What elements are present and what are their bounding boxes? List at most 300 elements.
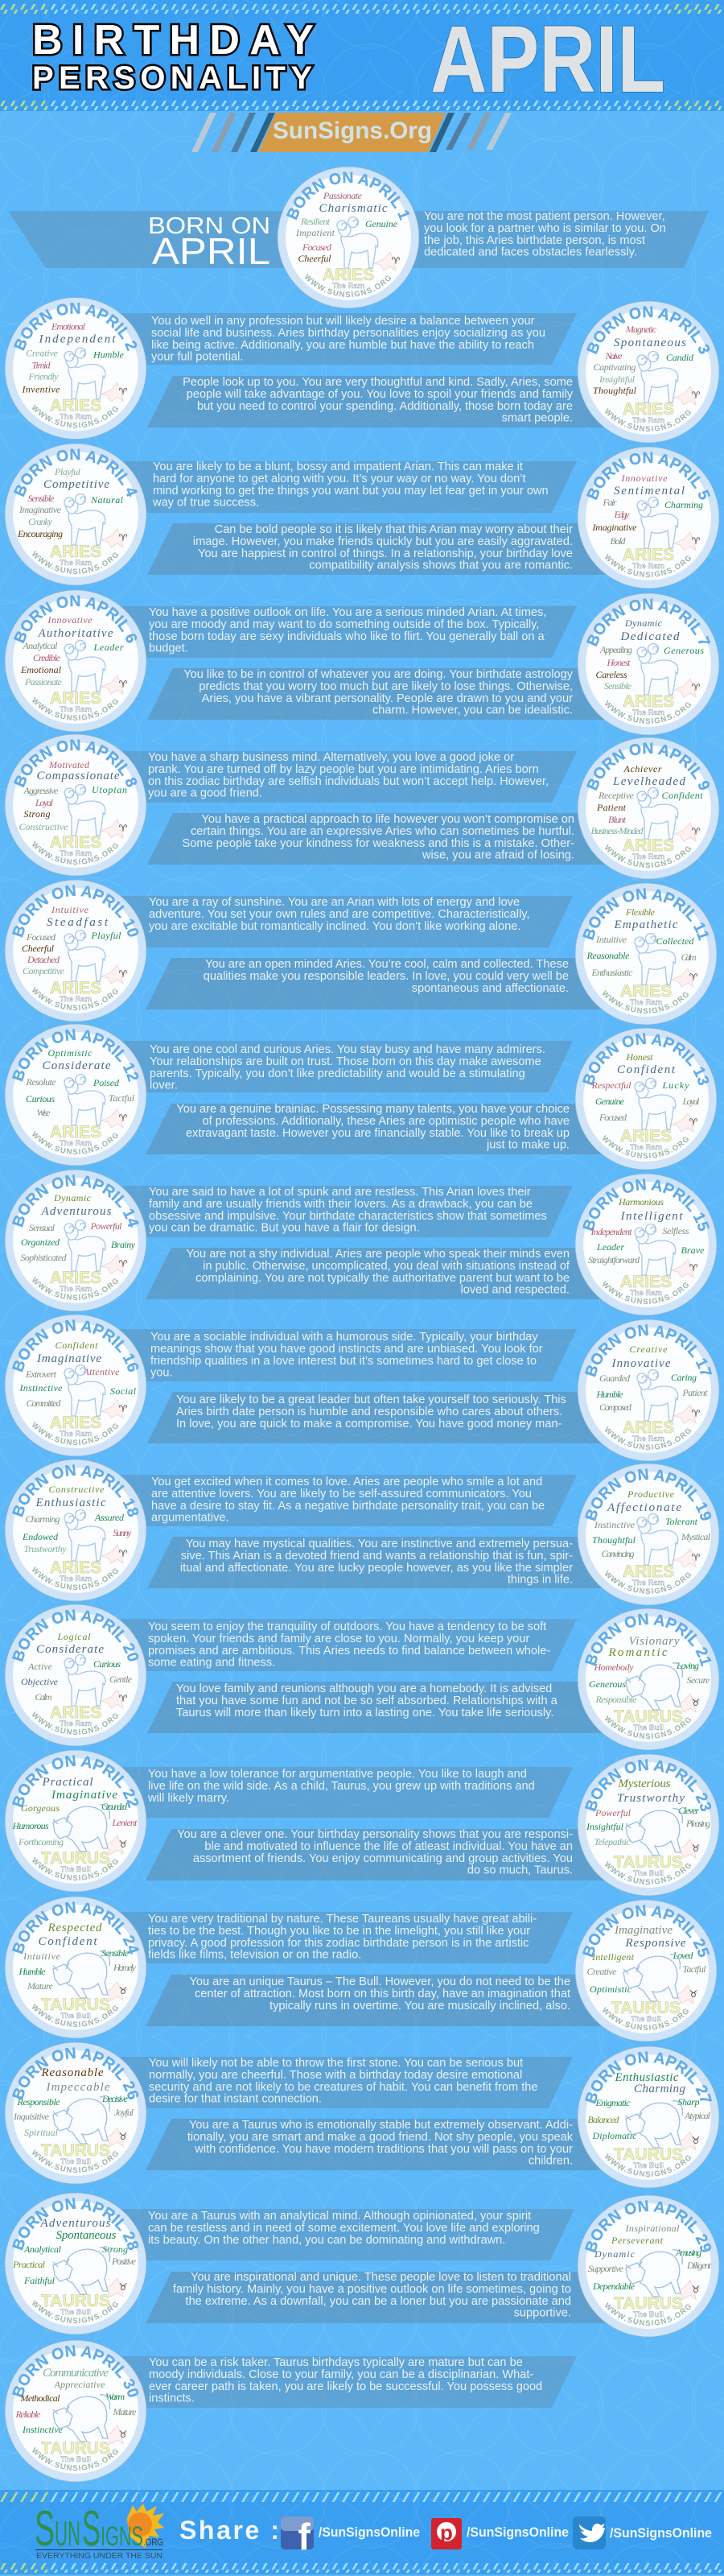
traits bbox=[21, 1192, 136, 1263]
icon: pinterest: p bbox=[440, 2520, 453, 2545]
traits: Patient bbox=[596, 802, 627, 813]
sign: TAURUS bbox=[614, 1707, 683, 1726]
traits: Considerate bbox=[42, 1059, 111, 1072]
traits: Leader bbox=[596, 1241, 624, 1253]
traits: Confident bbox=[39, 1935, 97, 1948]
text: april 5: compatibility analysis shows that you are romantic. bbox=[309, 559, 573, 572]
sign: TAURUS bbox=[611, 1999, 681, 2017]
traits: Assured bbox=[94, 1512, 125, 1523]
traits: Thoughtful bbox=[592, 1534, 636, 1546]
badge: April 1 bbox=[277, 166, 420, 309]
zodiac glyph: ♈ bbox=[119, 1548, 128, 1559]
traits: Practical bbox=[12, 2259, 46, 2270]
animal: The Ram bbox=[632, 1435, 664, 1443]
icon: facebook bbox=[281, 2516, 314, 2557]
traits: Imaginative bbox=[614, 1924, 673, 1937]
text: april 18: have a desire to stay fit. As a negative birthdate personality trait, you can be bbox=[151, 1500, 545, 1513]
website: WWW.SUNSIGNS.ORG bbox=[605, 1571, 691, 1594]
traits: Emotional bbox=[51, 320, 86, 332]
panel: april 14 text bbox=[121, 1186, 573, 1237]
website: WWW.SUNSIGNS.ORG bbox=[605, 844, 691, 868]
text: april 27: tionally, you are smart and make a good friend. Not shy people, you speak bbox=[187, 2131, 574, 2144]
traits: Imaginative bbox=[592, 522, 637, 533]
traits: Genuine bbox=[595, 1096, 625, 1107]
traits: Levelheaded bbox=[612, 775, 685, 788]
text: april 28: You are a Taurus with an analytical mind. Although opinionated, your spirit bbox=[148, 2210, 531, 2223]
text: april 17: You are likely to be a great leader but often take yourself too seriously. This bbox=[176, 1393, 566, 1406]
website: WWW.SUNSIGNS.ORG bbox=[603, 2153, 694, 2179]
panel: april 12 text bbox=[121, 1041, 573, 1092]
traits: Telepathic bbox=[594, 1836, 631, 1847]
sign: TAURUS bbox=[41, 1996, 110, 2014]
sign: ARIES bbox=[50, 1558, 101, 1577]
icon: ram bbox=[637, 351, 678, 402]
panel: april 18 text bbox=[121, 1475, 577, 1526]
traits: Imaginative bbox=[36, 1352, 101, 1365]
text: april 18: argumentative. bbox=[151, 1512, 229, 1525]
text: april 2: social life and business. Aries birthday personalities enjoy socializing as you bbox=[151, 327, 545, 340]
text: april 26: You will likely not be able to throw the first stone. You can be serious but bbox=[149, 2057, 523, 2070]
traits: Enigmatic bbox=[595, 2097, 631, 2108]
traits: Perseverant bbox=[611, 2235, 664, 2246]
animal: The Bull bbox=[60, 2157, 91, 2166]
sign: ARIES bbox=[50, 396, 101, 415]
animal: The Ram bbox=[332, 282, 364, 291]
traits: Dynamic bbox=[594, 2248, 636, 2260]
website: WWW.SUNSIGNS.ORG bbox=[605, 700, 691, 724]
panel: april 7 text bbox=[147, 668, 615, 720]
traits: Independent bbox=[39, 333, 116, 346]
sign: ARIES bbox=[623, 1563, 674, 1581]
animal: The Ram bbox=[630, 1143, 662, 1152]
animal: The Ram bbox=[632, 708, 664, 717]
traits: Brave bbox=[681, 1245, 705, 1256]
traits: Emotional bbox=[20, 664, 62, 675]
traits: Timid bbox=[32, 359, 51, 370]
text: april 21: You love family and reunions although you are a homebody. It is advised bbox=[176, 1682, 552, 1695]
traits: Aggressive bbox=[23, 785, 59, 796]
text: april 14: family and are usually friends with their lovers. As a drawback, you can be bbox=[149, 1198, 533, 1211]
traits: Strong bbox=[102, 2244, 128, 2255]
icon: ram bbox=[64, 1220, 105, 1271]
title: BORN ON APRIL 14 bbox=[12, 1174, 139, 1228]
traits: Considerate bbox=[36, 1643, 104, 1656]
zodiac glyph: ♉ bbox=[119, 1839, 127, 1850]
traits: Brainy bbox=[111, 1239, 136, 1250]
text: april 4: You are likely to be a blunt, bossy and impatient Arian. This can make it bbox=[153, 460, 523, 473]
text: april 30: moody individuals. Close to your family, you can be a disciplinarian. What- bbox=[149, 2368, 533, 2381]
website: WWW.SUNSIGNS.ORG bbox=[603, 2301, 694, 2328]
traits: Grounded bbox=[101, 1801, 128, 1812]
traits bbox=[590, 763, 703, 836]
traits: Attentive bbox=[82, 1366, 120, 1377]
website: WWW.SUNSIGNS.ORG bbox=[32, 404, 118, 428]
traits: Magnetic bbox=[625, 324, 657, 335]
sign: ARIES bbox=[50, 543, 101, 561]
traits: Productive bbox=[627, 1488, 675, 1500]
traits: Social bbox=[110, 1385, 137, 1397]
traits: Enthusiastic bbox=[590, 967, 633, 978]
animal: The Bull bbox=[633, 2310, 664, 2319]
text: april 5: You are happiest in control of things. In a relationship, your birthday love bbox=[198, 547, 573, 560]
title: BORN ON APRIL 4 bbox=[14, 449, 138, 497]
sign: ARIES bbox=[623, 692, 674, 711]
traits bbox=[593, 324, 694, 396]
zodiac glyph: ♉ bbox=[692, 1843, 700, 1854]
text: april 26: normally, you are cheerful. Those with a birthday today desire emotional bbox=[149, 2069, 522, 2082]
sign: ARIES bbox=[50, 1414, 101, 1432]
icon: ram bbox=[64, 1655, 105, 1706]
traits: Sensible bbox=[101, 1947, 130, 1959]
animal: The Bull bbox=[633, 1869, 664, 1878]
share label: Share : bbox=[179, 2516, 279, 2545]
traits: Charming bbox=[26, 1513, 60, 1525]
text: april 4: hard for anyone to get along with you. It’s your way or no way. You don’t bbox=[153, 473, 526, 485]
website: WWW.SUNSIGNS.ORG bbox=[32, 697, 118, 721]
text: april 23: ble and motivated to influence the life of atleast individual. You have an bbox=[204, 1840, 573, 1853]
traits: Creative bbox=[26, 348, 59, 359]
zodiac glyph: ♈ bbox=[392, 255, 401, 266]
traits bbox=[19, 759, 127, 832]
text: april 13: You are a genuine brainiac. Possessing many talents, you have your choice bbox=[176, 1103, 570, 1116]
panel: april 3 text bbox=[147, 376, 615, 427]
animal: The Ram bbox=[630, 1289, 662, 1298]
traits: Confident bbox=[661, 790, 703, 801]
traits: Appealing bbox=[599, 644, 632, 655]
text: april 7: charm. However, you can be idealistic. bbox=[372, 704, 573, 716]
traits bbox=[14, 2367, 137, 2435]
traits: Achiever bbox=[623, 763, 662, 774]
text: april 6: you are moody and may want to do something outside of the box. Typically, bbox=[149, 618, 539, 631]
traits: Flexible bbox=[625, 906, 656, 918]
traits: Compassionate bbox=[37, 770, 120, 782]
traits: Insightful bbox=[599, 374, 636, 385]
sign: TAURUS bbox=[614, 1853, 683, 1872]
zodiac glyph: ♉ bbox=[119, 2131, 127, 2142]
title: BORN ON APRIL 20 bbox=[12, 1609, 138, 1662]
traits bbox=[589, 1635, 710, 1705]
traits: Optimistic bbox=[590, 1984, 632, 1995]
traits: Pleasing bbox=[685, 1818, 710, 1829]
traits: Mystical bbox=[681, 1531, 711, 1542]
logo: SunSigns: S bbox=[82, 2501, 101, 2557]
footer band bbox=[0, 2490, 724, 2576]
badge: April 5 bbox=[578, 446, 719, 589]
zodiac glyph: ♈ bbox=[692, 1408, 701, 1419]
badge: April 25 bbox=[574, 1900, 718, 2041]
website: WWW.SUNSIGNS.ORG bbox=[30, 2003, 121, 2029]
traits: Edgy bbox=[613, 509, 630, 520]
sign: ARIES bbox=[620, 982, 672, 1001]
icon: ram bbox=[64, 1365, 105, 1416]
traits: Harmonious bbox=[618, 1196, 664, 1208]
text: april 11: spontaneous and affectionate. bbox=[412, 982, 569, 995]
sign: ARIES bbox=[50, 979, 101, 997]
text: april 12: You are one cool and curious Aries. You stay busy and have many admirers. bbox=[150, 1043, 545, 1056]
traits: Convincing bbox=[602, 1548, 634, 1559]
animal: The Ram bbox=[632, 852, 664, 861]
text: april 29: the extreme. As a downfall, you can be a loner but you are passionate and bbox=[186, 2295, 571, 2308]
traits bbox=[592, 1488, 711, 1559]
sign: ARIES bbox=[50, 1123, 101, 1141]
traits: Homely bbox=[113, 1962, 137, 1973]
badge: April 13 bbox=[574, 1027, 718, 1170]
traits: Independent bbox=[590, 1226, 632, 1237]
badge: April 24 bbox=[5, 1897, 146, 2038]
website: WWW.SUNSIGNS.ORG bbox=[600, 2006, 692, 2033]
traits: Reasonable bbox=[40, 2066, 104, 2079]
traits: Objective bbox=[21, 1676, 59, 1687]
website: WWW.SUNSIGNS.ORG bbox=[605, 554, 691, 578]
text: april 6: budget. bbox=[149, 642, 188, 655]
traits: Mysterious bbox=[618, 1777, 671, 1790]
zodiac glyph: ♈ bbox=[119, 679, 128, 690]
traits: Dedicated bbox=[619, 630, 680, 643]
traits: Charming bbox=[634, 2083, 685, 2095]
traits: Creative bbox=[629, 1344, 668, 1355]
panel: april 28 text bbox=[121, 2209, 574, 2260]
logo: SunSigns bbox=[35, 2501, 164, 2561]
text: april 19: You may have mystical qualities. You are instinctive and extremely persua- bbox=[186, 1538, 573, 1550]
text: april 15: You are not a shy individual. Aries are people who speak their minds even bbox=[187, 1248, 570, 1261]
animal: The Ram bbox=[632, 562, 664, 571]
text: april 10: you are excitable but romantically inclined. You don’t like working alone. bbox=[149, 920, 520, 933]
icon: bull bbox=[626, 2101, 682, 2148]
title: BORN ON APRIL 28 bbox=[9, 2195, 142, 2252]
traits bbox=[17, 466, 124, 539]
traits: Insightful bbox=[586, 1821, 624, 1832]
traits: Humble bbox=[18, 1966, 46, 1977]
panel: april 17 text bbox=[147, 1392, 615, 1443]
traits: Empathetic bbox=[613, 919, 678, 931]
traits: Secure bbox=[687, 1674, 710, 1686]
text: april 24: fields like films, television or on the radio. bbox=[148, 1948, 361, 1961]
traits: Dependable bbox=[592, 2281, 636, 2292]
sign: TAURUS bbox=[41, 2439, 110, 2458]
traits: Innovative bbox=[621, 473, 668, 484]
badge: April 6 bbox=[5, 589, 146, 733]
traits: Leader bbox=[93, 642, 124, 653]
traits: Humorous bbox=[11, 1820, 49, 1831]
logo: SunSigns: .ORG bbox=[143, 2537, 163, 2548]
traits: Intuitive bbox=[51, 904, 89, 915]
animal: The Ram bbox=[60, 559, 92, 568]
text: april 2: your full potential. bbox=[151, 351, 243, 364]
traits: Tactful bbox=[109, 1092, 135, 1104]
traits: Blunt bbox=[608, 814, 627, 825]
traits: Intelligent bbox=[619, 1210, 683, 1223]
text: april 30: instincts. bbox=[149, 2392, 195, 2405]
handle: twitter: /SunSignsOnline bbox=[610, 2525, 712, 2541]
traits: Thoughtful bbox=[593, 385, 637, 396]
traits: Enthusiastic bbox=[35, 1496, 106, 1509]
traits: Diligent bbox=[686, 2260, 712, 2271]
logo: SunSigns: IGNS bbox=[101, 2521, 143, 2552]
header band bbox=[0, 0, 724, 111]
traits: Atypical bbox=[684, 2110, 711, 2121]
text: april 10: adventure. You set your own rules and are competitive. Characteristically, bbox=[149, 908, 529, 921]
title: BORN ON APRIL 18 bbox=[12, 1464, 138, 1517]
panel: april 23 text bbox=[146, 1829, 615, 1880]
panel: april 6 text bbox=[121, 606, 577, 658]
icon: ram bbox=[64, 494, 105, 545]
traits: Selfless bbox=[663, 1225, 689, 1236]
traits: Humble bbox=[93, 349, 125, 361]
panel: april 21 text bbox=[147, 1682, 615, 1733]
traits: Resilient bbox=[300, 216, 331, 227]
badge: April 7 bbox=[578, 592, 719, 736]
traits: Organized bbox=[21, 1236, 60, 1248]
text: april 14: You are said to have a lot of spunk and are restless. This Arian loves their bbox=[149, 1186, 531, 1199]
text: april 26: desire for that instant connection. bbox=[149, 2093, 322, 2106]
traits: Instinctive bbox=[22, 2424, 64, 2435]
traits: Honest bbox=[607, 657, 631, 668]
zodiac glyph: ♈ bbox=[692, 682, 701, 693]
sign: ARIES bbox=[50, 1269, 101, 1287]
heading: april: APRIL bbox=[152, 230, 270, 272]
traits: Genuine bbox=[365, 218, 398, 229]
traits: Guarded bbox=[599, 1373, 631, 1384]
title: BORN ON APRIL 30 bbox=[9, 2343, 142, 2400]
badge: April 28 bbox=[5, 2193, 146, 2334]
traits: Diplomatic bbox=[592, 2130, 637, 2141]
animal: The Bull bbox=[60, 2308, 91, 2317]
traits: Sensible bbox=[604, 680, 632, 691]
text: april 6: those born today are sexy individuals who like to flirt. You generally ball on a bbox=[149, 630, 545, 643]
panel: april 9 text bbox=[147, 813, 615, 865]
text: april 14: you can be dramatic. But you have a flair for design. bbox=[149, 1222, 420, 1235]
traits: Appreciative bbox=[53, 2379, 105, 2390]
badge: April 4 bbox=[5, 443, 146, 586]
panel: april 2 text bbox=[121, 313, 577, 365]
traits bbox=[20, 614, 124, 687]
panel: april 25 text bbox=[146, 1975, 615, 2026]
traits: Reasonable bbox=[586, 950, 630, 961]
traits: Naive bbox=[605, 350, 623, 361]
sign: ARIES bbox=[620, 1273, 672, 1291]
panel: april 13 text bbox=[146, 1104, 615, 1154]
traits: Intuitive bbox=[595, 934, 627, 945]
traits: Charismatic bbox=[319, 202, 388, 215]
text: april 25: You are an unique Taurus – The Bull. However, you do not need to be the bbox=[189, 1975, 570, 1988]
sign: TAURUS bbox=[41, 1849, 110, 1868]
zodiac glyph: ♉ bbox=[692, 2135, 700, 2146]
website: WWW.SUNSIGNS.ORG bbox=[32, 987, 118, 1011]
text: april 22: You have a low tolerance for argumentative people. You like to laugh and bbox=[148, 1768, 527, 1781]
traits: Spontaneous bbox=[56, 2229, 117, 2242]
traits: Friendly bbox=[27, 370, 59, 382]
zodiac glyph: ♈ bbox=[692, 390, 701, 401]
traits: Honest bbox=[626, 1051, 653, 1063]
traits bbox=[586, 1777, 710, 1847]
text: april 14: obsessive and impulsive. Your birthdate characteristics show that sometimes bbox=[149, 1210, 547, 1223]
traits: Curious bbox=[26, 1093, 55, 1104]
badge: April 15 bbox=[574, 1174, 718, 1315]
text: april 20: some eating and fitness. bbox=[148, 1657, 275, 1670]
badge: April 8 bbox=[5, 734, 146, 876]
text: april 8: You have a sharp business mind. Alternatively, you love a good joke or bbox=[148, 751, 514, 764]
animal: The Ram bbox=[632, 416, 664, 425]
traits: Passionate bbox=[24, 676, 63, 687]
icon: ram bbox=[64, 784, 105, 836]
animal: The Ram bbox=[60, 1285, 92, 1294]
traits: Innovative bbox=[47, 614, 93, 625]
traits: Poised bbox=[93, 1077, 120, 1088]
traits: Constructive bbox=[19, 821, 68, 832]
brand tag bbox=[191, 113, 512, 152]
panel: april 10 text bbox=[121, 896, 573, 947]
traits: Impatient bbox=[295, 227, 335, 238]
traits: Authoritative bbox=[37, 627, 113, 640]
traits bbox=[18, 1922, 137, 1992]
sign: TAURUS bbox=[41, 2141, 110, 2160]
text: april 28: its beauty. On the other hand, you can be dominating and withdrawn. bbox=[148, 2234, 505, 2247]
traits: Sensible bbox=[27, 493, 55, 504]
traits: Responsive bbox=[624, 1937, 686, 1950]
traits: Sensual bbox=[29, 1222, 56, 1233]
text: april 18: You get excited when it comes to love. Aries are people who smile a lot and bbox=[151, 1476, 542, 1488]
title: BORN ON APRIL 9 bbox=[586, 742, 710, 791]
traits: Impeccable bbox=[45, 2081, 110, 2094]
panel: april 16 text bbox=[121, 1329, 577, 1381]
animal: The Bull bbox=[60, 2012, 91, 2021]
icon: bull bbox=[53, 2248, 109, 2294]
traits: Careless bbox=[595, 669, 627, 680]
sign: TAURUS bbox=[41, 2292, 110, 2310]
zodiac glyph: ♉ bbox=[119, 1985, 127, 1996]
traits: Loved bbox=[673, 1950, 693, 1961]
traits bbox=[19, 1340, 137, 1409]
zodiac glyph: ♈ bbox=[119, 1113, 128, 1124]
traits: Trustworthy bbox=[24, 1543, 67, 1554]
traits: Gorgeous bbox=[21, 1802, 60, 1814]
text: april 29: You are inspirational and unique. These people love to listen to traditional bbox=[191, 2271, 571, 2284]
sign: ARIES bbox=[50, 1703, 101, 1722]
traits: Endowed bbox=[22, 1531, 59, 1542]
traits bbox=[22, 904, 121, 976]
title: BORN ON APRIL 23 bbox=[582, 1757, 715, 1814]
website: WWW.SUNSIGNS.ORG bbox=[32, 551, 118, 575]
traits bbox=[26, 1047, 135, 1118]
logo: SunSigns: UN bbox=[55, 2514, 80, 2553]
zodiac glyph: ♈ bbox=[119, 1693, 128, 1704]
traits bbox=[11, 1776, 138, 1847]
title: BORN ON APRIL 16 bbox=[12, 1319, 138, 1372]
traits: Optimistic bbox=[48, 1047, 93, 1059]
animal: The Bull bbox=[60, 1865, 91, 1874]
title: birthday: BIRTHDAY bbox=[32, 17, 314, 64]
traits: Communicative bbox=[43, 2367, 109, 2380]
text: april 18: are attentive lovers. You are likely to be self-assured communicators. You bbox=[151, 1488, 532, 1501]
text: april 10: You are a ray of sunshine. You are an Arian with lots of energy and love bbox=[149, 896, 520, 909]
text: april 23: do so much, Taurus. bbox=[467, 1864, 573, 1877]
traits: Candid bbox=[666, 352, 694, 363]
text: april 3: People look up to you. You are very thoughtful and kind. Sadly, Aries, some bbox=[183, 376, 573, 389]
title: BORN ON APRIL 26 bbox=[9, 2045, 142, 2102]
text: april 23: assortment of friends. You enjoy communicating and group activities. You bbox=[193, 1852, 573, 1865]
text: april 17: In love, you are quick to make a compromise. You have good money man- bbox=[176, 1418, 562, 1430]
text: april 13: just to make up. bbox=[486, 1138, 570, 1151]
brand name: SunSigns.Org bbox=[273, 118, 432, 144]
traits: Inspirational bbox=[624, 2223, 680, 2234]
text: april 20: promises and are ambitious. This Aries needs to find balance between whole- bbox=[148, 1645, 550, 1657]
panel: april 5 text bbox=[147, 523, 615, 575]
traits: Cranky bbox=[28, 516, 53, 527]
text: april 23: You are a clever one. Your birthday personality shows that you are responsi- bbox=[177, 1828, 573, 1841]
sign: ARIES bbox=[50, 689, 101, 708]
website: WWW.SUNSIGNS.ORG bbox=[30, 2149, 121, 2175]
icon: ram bbox=[64, 1074, 105, 1125]
